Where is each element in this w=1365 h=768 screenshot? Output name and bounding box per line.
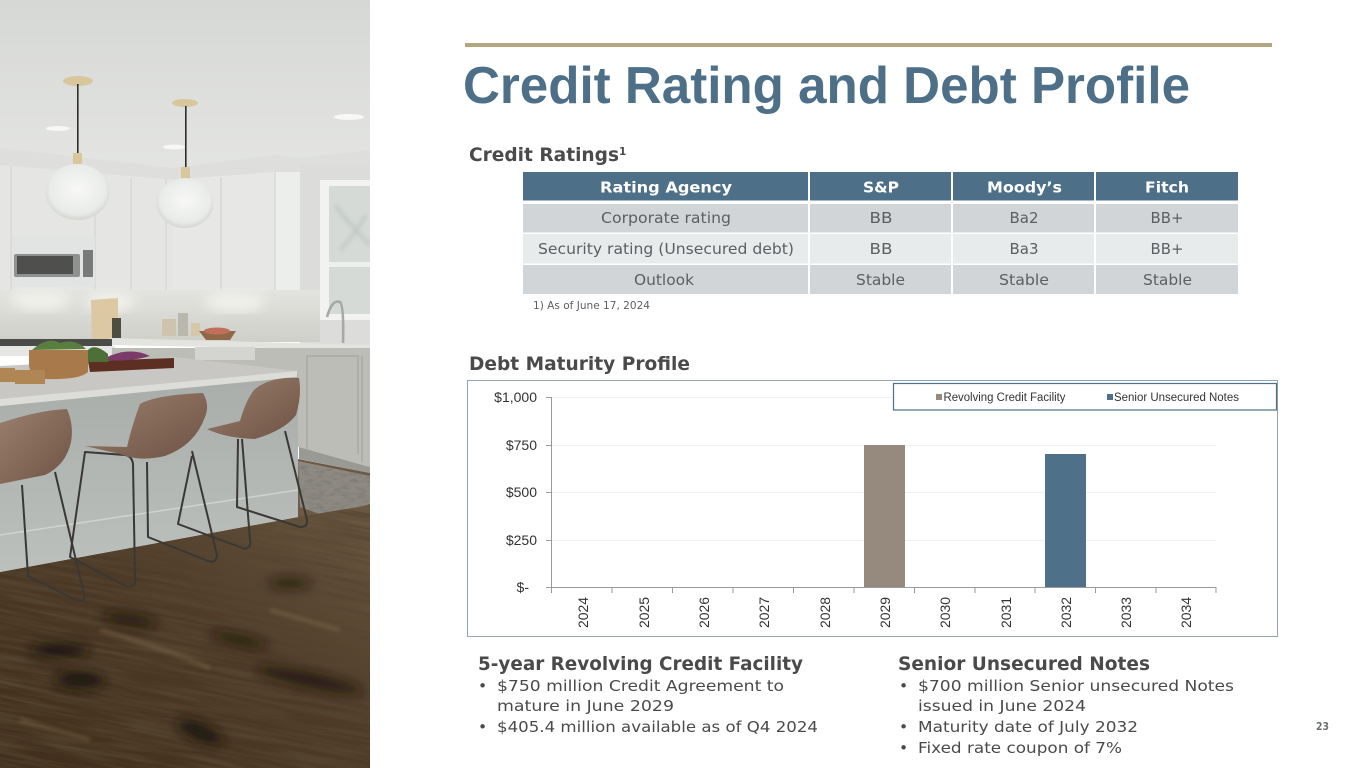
table header row: Rating Agency xyxy=(600,178,732,196)
x-axis labels: 2030 xyxy=(937,597,953,628)
gridlines and axes xyxy=(546,397,1216,593)
text block: revolving credit facility: 5-year Revolving Credit Facility xyxy=(478,653,804,675)
table header row: Fitch xyxy=(1145,178,1189,196)
x-axis labels: 2028 xyxy=(817,597,833,628)
window xyxy=(320,180,370,320)
backsplash xyxy=(0,290,320,342)
row: outlook: Stable xyxy=(1143,271,1192,289)
island counter xyxy=(0,357,297,406)
table header row: Moody’s xyxy=(987,178,1062,196)
row: corporate rating: Corporate rating xyxy=(601,209,731,227)
y-axis labels: $- xyxy=(517,579,529,595)
row: outlook xyxy=(523,265,1238,294)
island base xyxy=(0,374,298,572)
text block: senior unsecured notes: Fixed rate coupon of 7% xyxy=(918,739,1122,757)
y-axis labels: $500 xyxy=(506,484,537,500)
row: corporate rating xyxy=(523,204,1238,232)
text block: senior unsecured notes: issued in June 2024 xyxy=(918,697,1086,715)
stool legs xyxy=(22,431,307,601)
faucet xyxy=(327,302,343,343)
text block: revolving credit facility: $750 million Credit Agreement to xyxy=(497,677,784,695)
bar: senior unsecured notes 2032 xyxy=(1045,454,1086,587)
y-axis labels: $250 xyxy=(506,532,537,548)
text block: revolving credit facility: $405.4 million available as of Q4 2024 xyxy=(497,718,818,736)
title rule xyxy=(465,43,1272,47)
row: security rating: BB+ xyxy=(1150,240,1184,258)
x-axis labels: 2033 xyxy=(1118,597,1134,628)
row: security rating: Security rating (Unsecured debt) xyxy=(538,240,794,258)
x-axis labels xyxy=(575,597,1194,628)
row: security rating: Ba3 xyxy=(1010,240,1038,258)
bar: revolving credit facility 2029 xyxy=(864,445,905,587)
heading: credit ratings: Credit Ratings xyxy=(469,144,619,166)
legend: Senior Unsecured Notes xyxy=(1114,392,1239,404)
title: Credit Rating and Debt Profile xyxy=(463,57,1190,115)
x-axis labels: 2029 xyxy=(877,597,893,628)
row: security rating xyxy=(523,234,1238,264)
x-axis labels: 2025 xyxy=(636,597,652,628)
row: outlook: Stable xyxy=(856,271,905,289)
wood floor xyxy=(0,500,370,768)
table header row: S&P xyxy=(863,178,899,196)
page number: 23 xyxy=(1316,721,1329,733)
stool seats xyxy=(0,378,300,484)
back floor xyxy=(298,459,370,517)
text block: senior unsecured notes: • xyxy=(899,739,908,757)
row: corporate rating: BB+ xyxy=(1150,209,1184,227)
lower cabinets xyxy=(112,347,370,467)
ceiling xyxy=(0,0,370,175)
row: corporate rating: Ba2 xyxy=(1010,209,1038,227)
back counter xyxy=(110,338,300,348)
text block: revolving credit facility xyxy=(478,653,818,736)
row: outlook: Stable xyxy=(999,271,1049,289)
text block: senior unsecured notes xyxy=(898,653,1234,757)
legend: Revolving Credit Facility xyxy=(944,392,1066,404)
text block: senior unsecured notes: Senior Unsecured Notes xyxy=(898,653,1150,675)
text block: revolving credit facility: mature in June 2029 xyxy=(497,697,674,715)
x-axis labels: 2024 xyxy=(575,597,591,628)
row: security rating: BB xyxy=(870,240,892,258)
heading: debt maturity profile: Debt Maturity Profile xyxy=(469,353,690,375)
rug xyxy=(298,461,370,517)
text block: senior unsecured notes: Maturity date of July 2032 xyxy=(918,718,1138,736)
photo: kitchen interior xyxy=(0,0,370,768)
under-cabinet glow xyxy=(10,290,265,312)
x-axis labels: 2032 xyxy=(1058,597,1074,628)
pendant lamp right xyxy=(156,99,214,228)
y-axis labels xyxy=(494,389,537,595)
heading: credit ratings: 1 xyxy=(619,146,626,158)
x-axis labels: 2026 xyxy=(696,597,712,628)
cutting board and canisters xyxy=(91,298,236,340)
text block: senior unsecured notes: • xyxy=(899,718,908,736)
recessed lights xyxy=(46,114,364,150)
y-axis labels: $750 xyxy=(506,437,537,453)
pendant lamp left xyxy=(46,76,110,220)
microwave xyxy=(12,236,95,287)
text block: revolving credit facility: • xyxy=(478,718,487,736)
wall cabinets xyxy=(0,165,300,290)
row: corporate rating: BB xyxy=(870,209,892,227)
text block: revolving credit facility: • xyxy=(478,677,487,695)
y-axis labels: $1,000 xyxy=(494,389,537,405)
table header row xyxy=(523,172,1238,200)
chart panel xyxy=(468,380,1278,636)
footnote: 1) As of June 17, 2024 xyxy=(533,299,650,312)
row: outlook: Outlook xyxy=(634,271,694,289)
back wall xyxy=(300,175,370,345)
x-axis labels: 2027 xyxy=(756,597,772,628)
stove xyxy=(0,339,112,346)
text block: senior unsecured notes: $700 million Senior unsecured Notes xyxy=(918,677,1234,695)
baseboard xyxy=(299,447,370,473)
legend xyxy=(894,384,1276,410)
text block: senior unsecured notes: • xyxy=(899,677,908,695)
x-axis labels: 2034 xyxy=(1178,597,1194,628)
crown molding xyxy=(118,175,234,180)
produce board and bowls xyxy=(0,341,174,384)
x-axis labels: 2031 xyxy=(998,597,1014,628)
ratings table xyxy=(523,172,1238,294)
